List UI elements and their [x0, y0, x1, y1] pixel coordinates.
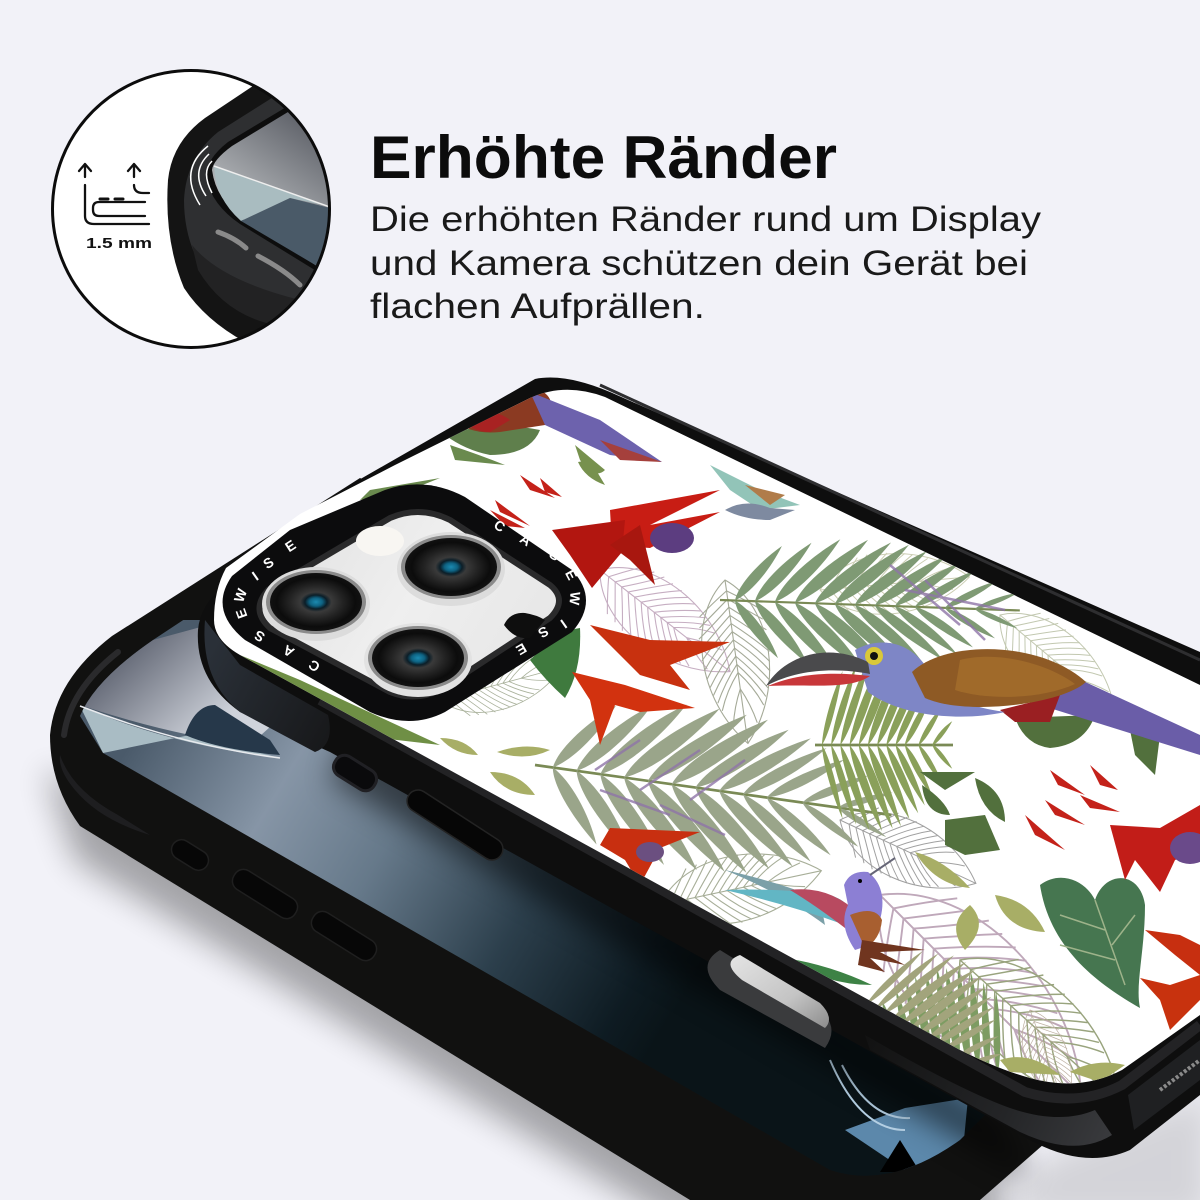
CASEWISE lettering: I — [249, 568, 261, 584]
CASEWISE lettering: A — [280, 642, 297, 661]
text block: description: flachen Aufprällen. — [370, 287, 705, 326]
label: 1.5 mm: 1.5 mm — [86, 235, 152, 252]
CASEWISE lettering: E — [232, 607, 250, 621]
front phone shadow on screen — [330, 720, 1030, 1180]
CASEWISE lettering: W — [566, 591, 584, 606]
CASEWISE lettering: W — [231, 586, 250, 604]
pattern: purple frond tint — [595, 565, 1005, 835]
CASEWISE lettering: C — [305, 657, 323, 676]
pattern: large hummingbird — [725, 858, 925, 972]
charging port — [708, 950, 832, 1048]
phone corner close-up — [167, 86, 328, 338]
text block: description: Die erhöhten Ränder rund um Display — [370, 200, 1042, 239]
CASEWISE lettering: S — [546, 546, 563, 564]
text block: description: und Kamera schützen dein Gerät bei — [370, 244, 1028, 283]
flash — [356, 526, 404, 556]
side buttons — [168, 836, 380, 964]
lens top right — [397, 532, 505, 606]
back phone case — [50, 478, 1060, 1200]
pattern: red flowers — [552, 490, 1200, 1030]
CASEWISE lettering: I — [558, 616, 570, 632]
back phone drop shadow — [45, 770, 1000, 1200]
phone screen — [212, 112, 328, 266]
side buttons and port — [330, 751, 380, 795]
CASEWISE lettering — [231, 516, 584, 676]
heading: Erhöhte Ränder — [370, 124, 837, 191]
impact arcs — [191, 146, 212, 205]
CASEWISE lettering: E — [282, 537, 299, 555]
lens bottom — [364, 623, 472, 697]
pattern: toucan — [766, 643, 1200, 755]
CASEWISE lettering: S — [535, 623, 552, 642]
screen — [80, 620, 968, 1172]
rim stroke — [320, 700, 1200, 1099]
case bumper near camera — [204, 620, 330, 752]
front phone case — [198, 378, 1200, 1158]
camera island — [223, 484, 586, 721]
pattern: red buds — [490, 475, 1120, 850]
text block: description — [370, 200, 1042, 326]
CASEWISE lettering: E — [513, 640, 530, 659]
camera window — [259, 512, 559, 697]
CASEWISE lettering: E — [562, 567, 581, 583]
CASEWISE lettering: S — [251, 627, 268, 646]
pattern: top bird — [468, 392, 662, 462]
CASEWISE lettering: A — [517, 530, 534, 549]
pattern: line leaves — [433, 543, 1150, 1138]
callout circle: raised edge detail — [51, 69, 331, 349]
pattern: leaves — [240, 426, 1160, 1082]
frame highlight — [60, 755, 150, 835]
CASEWISE lettering: S — [260, 554, 277, 572]
lens left — [262, 567, 370, 641]
microphone — [504, 613, 545, 638]
case back: tropical pattern — [214, 390, 1200, 1084]
CASEWISE lettering: C — [491, 516, 508, 535]
highlights — [218, 232, 300, 285]
pattern: palm fronds — [523, 531, 1035, 1167]
pattern: small hummingbird — [710, 465, 800, 520]
icon: raised edge 1.5 mm diagram — [79, 164, 149, 224]
